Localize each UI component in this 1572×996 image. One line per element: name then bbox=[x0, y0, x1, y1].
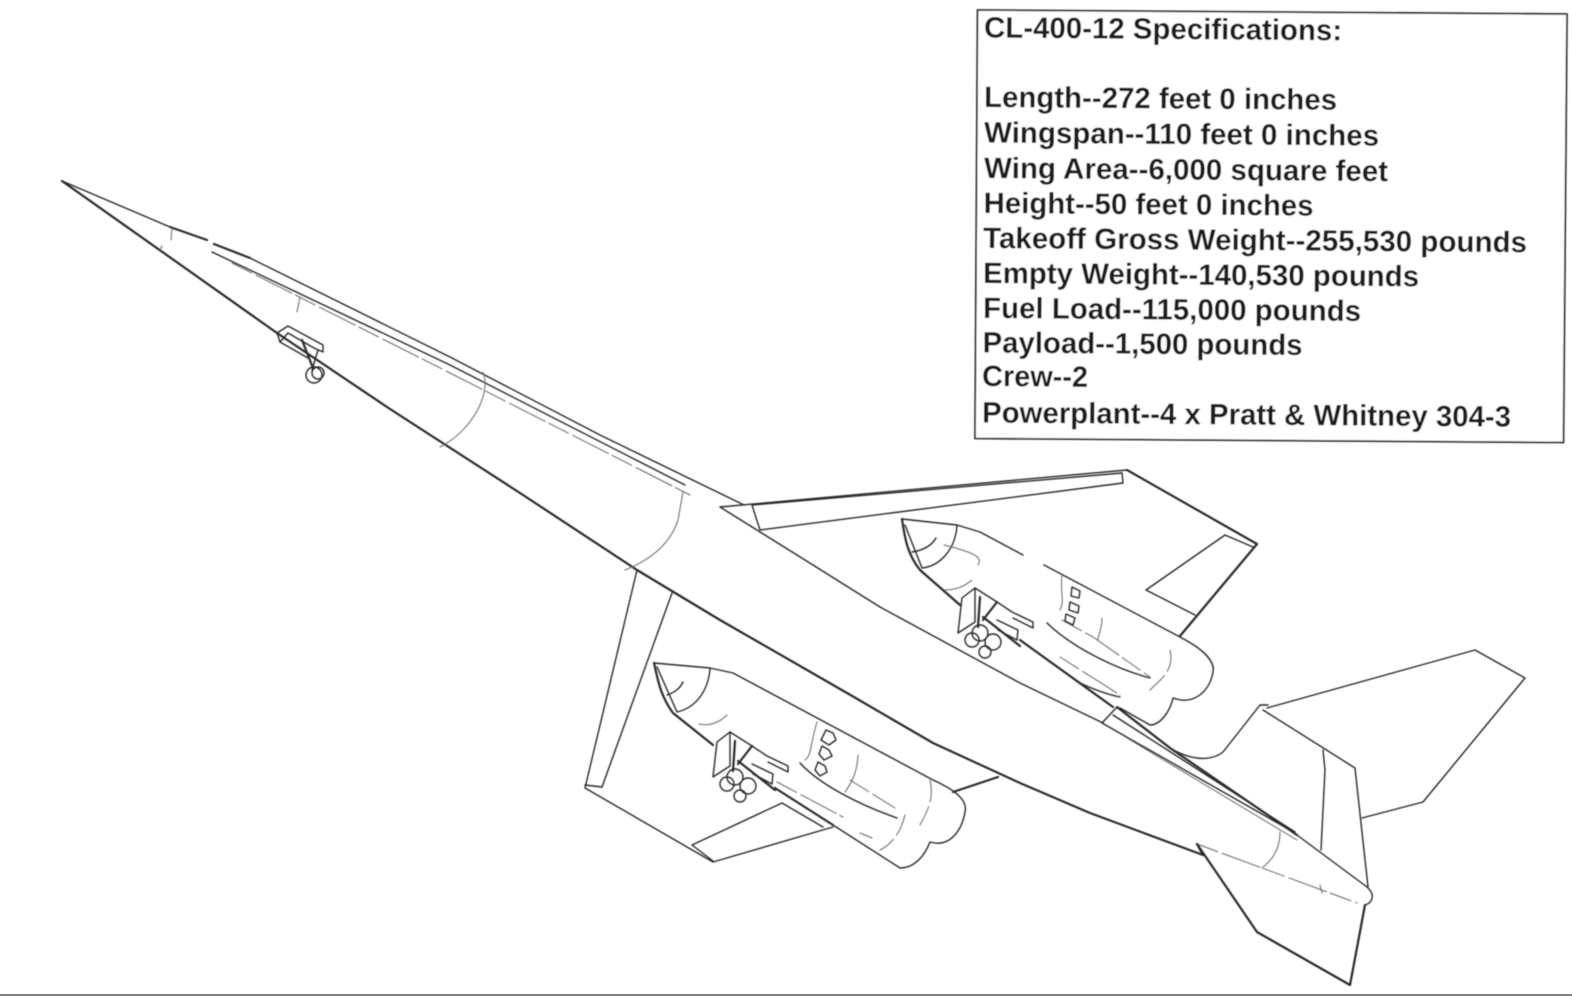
left wing bbox=[585, 570, 998, 862]
spec lines: Empty Weight--140,530 pounds bbox=[983, 257, 1419, 293]
aircraft line drawing bbox=[62, 181, 1525, 985]
spec lines: Payload--1,500 pounds bbox=[982, 327, 1303, 362]
horizontal stabilizer bbox=[1267, 650, 1525, 818]
rear fuselage and tail cone bbox=[1102, 707, 1372, 905]
box title: CL-400-12 Specifications: bbox=[984, 12, 1342, 47]
fuselage bbox=[62, 181, 1203, 855]
right wing bbox=[720, 470, 1257, 636]
right engine nacelle bbox=[902, 519, 1213, 725]
left engine nacelle bbox=[654, 663, 965, 868]
box border bbox=[975, 10, 1567, 442]
ventral fin bbox=[1197, 844, 1365, 985]
nose landing gear bbox=[277, 326, 324, 383]
spec lines bbox=[982, 81, 1527, 434]
spec lines: Crew--2 bbox=[982, 360, 1088, 394]
spec lines: Wing Area--6,000 square feet bbox=[984, 152, 1388, 188]
bottom edge rule bbox=[0, 994, 1572, 996]
spec lines: Powerplant--4 x Pratt & Whitney 304-3 bbox=[982, 397, 1511, 434]
spec lines: Height--50 feet 0 inches bbox=[983, 187, 1314, 223]
spec lines: Fuel Load--115,000 pounds bbox=[983, 292, 1361, 328]
dorsal fin bbox=[1170, 705, 1368, 887]
specifications box bbox=[975, 10, 1567, 442]
spec lines: Wingspan--110 feet 0 inches bbox=[984, 117, 1379, 153]
left main landing gear bbox=[713, 732, 788, 802]
right main landing gear bbox=[958, 588, 1033, 658]
spec lines: Length--272 feet 0 inches bbox=[984, 81, 1337, 117]
spec lines: Takeoff Gross Weight--255,530 pounds bbox=[983, 222, 1527, 259]
